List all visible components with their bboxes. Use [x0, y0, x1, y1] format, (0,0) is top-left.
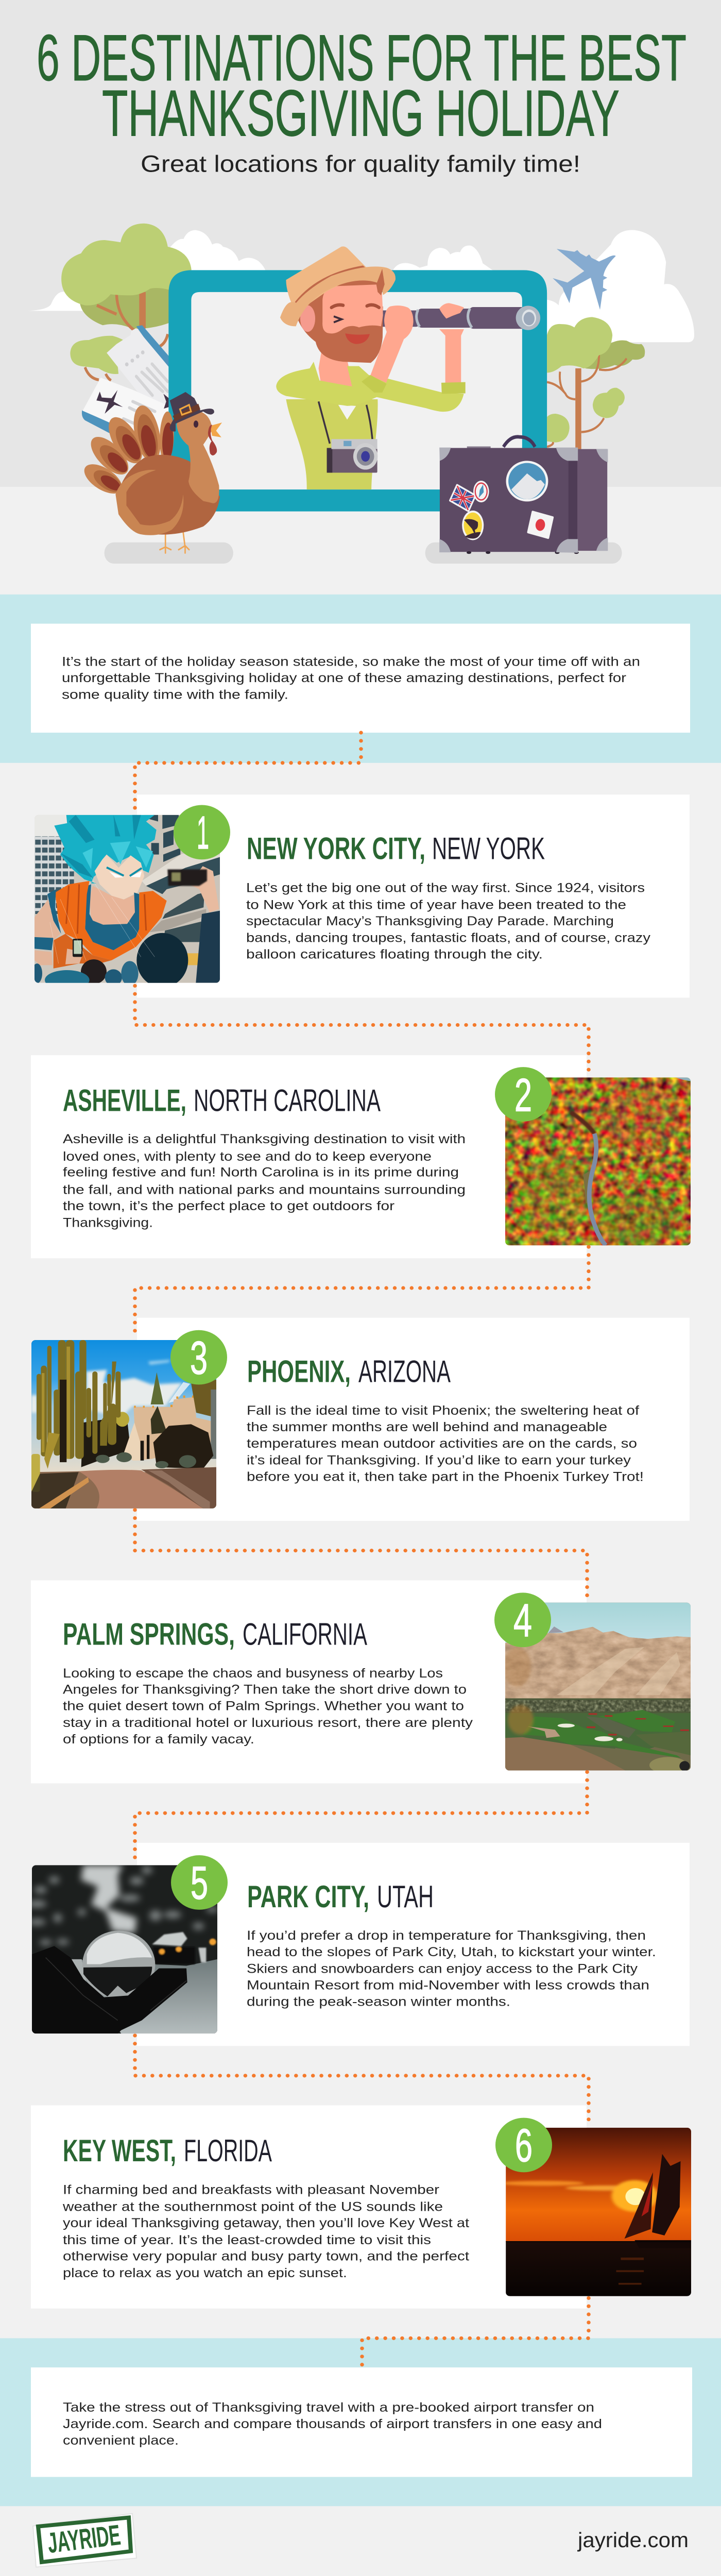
closing text: Jayride.com. Search and compare thousands of airport transfers in one easy and: [63, 2417, 602, 2431]
number badge 4: 4: [513, 1595, 532, 1647]
card 4 text: stay in a traditional hotel or luxurious resort, there are plenty: [63, 1716, 473, 1730]
card 2 heading: ASHEVILLE,: [63, 1083, 186, 1118]
intro band: [0, 595, 721, 763]
logo: Jayride stamp: [33, 2514, 136, 2567]
photo: crystal ball in snow: [28, 1865, 218, 2033]
number badge 6: 6: [515, 2120, 533, 2172]
intro text: [62, 655, 640, 702]
card 4 text: Looking to escape the chaos and busyness of nearby Los: [63, 1666, 443, 1681]
icon: right tree: [547, 317, 645, 449]
gloved hand: [32, 1946, 187, 2033]
intro text: unforgettable Thanksgiving holiday at one of these amazing destinations, perfect for: [62, 671, 626, 685]
card 2 heading: NORTH CAROLINA: [194, 1083, 381, 1118]
closing panel: [31, 2367, 692, 2477]
card 3 text: Fall is the ideal time to visit Phoenix; the sweltering heat of: [247, 1404, 639, 1418]
closing text: [63, 2400, 602, 2448]
website url: jayride.com: [577, 2529, 689, 2552]
man: face: [322, 284, 383, 333]
icon: right cloud: [547, 230, 694, 342]
intro panel: [31, 624, 690, 733]
number badge 5: [171, 1855, 228, 1910]
sticker: mountain: [506, 461, 548, 501]
man: eyes and brows: [334, 316, 341, 323]
turkey: beak: [210, 422, 222, 437]
card 6 text: your ideal Thanksgiving getaway, then you’ll love Key West at: [63, 2216, 469, 2230]
card 5 text: [247, 1928, 656, 2009]
turkey: wing: [115, 470, 183, 535]
card 2 text: the fall, and with national parks and mountains surrounding: [63, 1183, 466, 1197]
card 4 text: [63, 1666, 473, 1747]
card 6 text: If charming bed and breakfasts with pleasant November: [63, 2183, 439, 2197]
turkey: body: [116, 455, 220, 535]
card 5 text: If you’d prefer a drop in temperature for Thanksgiving, then: [247, 1928, 646, 1943]
adobe building: [133, 1397, 211, 1461]
card 1 text: spectacular Macy’s Thanksgiving Day Parade. Marching: [246, 914, 614, 928]
panel: card 2 Asheville: [31, 1055, 691, 1258]
card 2 text: Asheville is a delightful Thanksgiving destination to visit with: [63, 1132, 466, 1146]
sticker: union flag: [449, 484, 477, 513]
man: beard: [316, 307, 383, 363]
icon: small left tree: [70, 336, 127, 381]
card 1 text: [246, 881, 651, 961]
card 6 heading: KEY WEST,: [63, 2133, 176, 2168]
card 3 text: before you eat it, then take part in the Phoenix Turkey Trot!: [247, 1470, 644, 1484]
card 2 text: feeling festive and fun! North Carolina is in its prime during: [63, 1165, 459, 1180]
card 3 text: [247, 1404, 644, 1484]
suitcase: handle: [504, 437, 535, 447]
number badge 2: [495, 1067, 552, 1122]
card 1 text: Let’s get the big one out of the way first. Since 1924, visitors: [246, 881, 645, 895]
man: raised arms: [370, 331, 461, 383]
panel: card 6 Key West: [31, 2106, 691, 2309]
snow ground: [71, 1959, 217, 2033]
photographer hand: [189, 866, 219, 912]
cabin: [152, 1932, 216, 1964]
man: torso: [286, 399, 378, 489]
man: hat: [280, 246, 396, 326]
card 5 text: Skiers and snowboarders can enjoy access to the Park City: [247, 1962, 638, 1976]
panel: card 4 Palm Springs: [31, 1580, 691, 1784]
balloon hair: [54, 815, 157, 884]
card 1 text: to New York at this time of year have been treated to the: [246, 898, 626, 912]
card 6 text: this time of year. It’s the least-crowded time to visit this: [63, 2233, 431, 2247]
card 5 text: head to the slopes of Park City, Utah, to kickstart your winter.: [247, 1945, 656, 1959]
closing text: Take the stress out of Thanksgiving travel with a pre-booked airport transfer on: [63, 2400, 594, 2415]
card 5 heading: UTAH: [377, 1879, 434, 1914]
sticker: kangaroo: [462, 511, 484, 540]
closing band: [0, 2338, 721, 2506]
panel: card 3 Phoenix: [31, 1318, 690, 1521]
panel: card 5 Park City: [28, 1843, 690, 2046]
icon: centre cloud: [393, 245, 492, 270]
intro text: It’s the start of the holiday season stateside, so make the most of your time off with an: [62, 655, 640, 669]
card 6 text: weather at the southernmost point of the US sounds like: [62, 2200, 443, 2214]
icon: turkey: [80, 392, 222, 553]
crowd: [136, 933, 188, 988]
card 5 text: Mountain Resort from mid-November with less crowds than: [247, 1978, 649, 1992]
saguaro cacti: [37, 1340, 121, 1459]
card 3 heading: ARIZONA: [358, 1354, 451, 1389]
icon: traveller with telescope: [276, 246, 540, 489]
turkey: tail feathers: [80, 402, 175, 500]
balloon chest: [90, 886, 138, 925]
balloon face: [95, 855, 144, 900]
turkey: legs: [160, 532, 189, 553]
icon: camera: [327, 439, 377, 473]
closing text: convenient place.: [63, 2434, 179, 2448]
glass ball: [82, 1930, 155, 1998]
card 3 text: temperatures mean outdoor activities are on the cards, so: [247, 1437, 637, 1451]
telescope: [366, 306, 540, 330]
number badge 3: 3: [190, 1332, 208, 1384]
card 6 text: place to relax as you watch an epic sunset.: [63, 2266, 347, 2280]
card 1 heading: NEW YORK: [432, 831, 545, 866]
icon: left tree: [61, 224, 192, 346]
icon: suitcase: [439, 437, 608, 554]
photo: parade balloon: [32, 815, 220, 990]
icon: airplane: [553, 249, 616, 310]
photo: autumn forest: [505, 1077, 691, 1247]
title: [37, 22, 686, 150]
suitcase: metal corners: [439, 448, 608, 553]
wooden rail: [39, 1477, 89, 1509]
turkey: neck and head: [177, 411, 219, 503]
card 2 text: the town, it’s the perfect place to get outdoors for: [63, 1199, 394, 1213]
number badge 2: 2: [514, 1069, 532, 1121]
man: camera straps: [319, 401, 372, 444]
suitcase: feet: [467, 551, 579, 554]
card 1 text: bands, dancing troupes, fantastic floats, and of course, crazy: [246, 931, 651, 945]
card 1 heading: NEW YORK CITY,: [247, 831, 425, 866]
hero illustration: [28, 224, 694, 564]
number badge 3: [170, 1330, 227, 1385]
logo: Jayride stamp: JAYRIDE: [46, 2519, 123, 2560]
man: neck: [319, 351, 353, 387]
man: shirt collar gap: [338, 405, 356, 420]
card 2 text: loved ones, with plenty to see and do to keep everyone: [63, 1149, 432, 1164]
number badge 1: 1: [197, 807, 209, 859]
photo: desert garden: [31, 1340, 216, 1509]
card 2 text: Thanksgiving.: [63, 1216, 153, 1230]
turkey shadow: [105, 543, 233, 564]
card 3 heading: PHOENIX,: [247, 1354, 351, 1389]
card 4 text: Angeles for Thanksgiving? Then take the short drive down to: [63, 1683, 467, 1697]
turkey: eye: [194, 420, 198, 428]
man: hair: [294, 268, 385, 342]
card 5 text: during the peak-season winter months.: [247, 1995, 510, 2009]
balloon gi: [55, 881, 167, 960]
number badge 5: 5: [191, 1857, 208, 1909]
background foliage: [81, 1419, 130, 1467]
suitcase shadow: [425, 543, 622, 564]
card 4 heading: PALM SPRINGS,: [63, 1617, 235, 1652]
card 4 heading: CALIFORNIA: [243, 1617, 368, 1652]
card 4 text: of options for a family vacay.: [63, 1733, 254, 1747]
photo: desert golf course: [504, 1603, 691, 1773]
sticker: compass: [473, 481, 489, 502]
right tree and cactus: [191, 1380, 216, 1418]
turkey: wattle: [208, 425, 217, 455]
number badge 1: [174, 805, 230, 859]
balloon arm: [35, 899, 60, 940]
balloon undershirt: [85, 884, 139, 951]
man: mouth: [345, 333, 370, 344]
icon: left cloud: [28, 230, 265, 311]
card 1 text: balloon caricatures floating through the city.: [246, 947, 543, 961]
card 6 text: [62, 2183, 469, 2280]
card 3 text: it’s ideal for Thanksgiving. If you’d like to earn your turkey: [247, 1453, 631, 1467]
frame: [168, 270, 547, 512]
card 3 text: the summer months are well behind and manageable: [247, 1420, 607, 1434]
suitcase: body: [576, 449, 607, 551]
card 6 text: otherwise very popular and busy party town, and the perfect: [63, 2249, 469, 2263]
sticker: japan flag: [527, 511, 554, 539]
card 5 heading: PARK CITY,: [247, 1879, 369, 1914]
intro text: some quality time with the family.: [62, 688, 288, 702]
card 2 heading: [63, 1083, 381, 1118]
subtitle: Great locations for quality family time!: [141, 150, 580, 177]
card 2 text: [63, 1132, 466, 1230]
header background: [0, 0, 721, 595]
photo: sunset sailboat: [501, 2128, 691, 2296]
panel: card 1 New York City: [32, 794, 690, 998]
number badge 6: [495, 2118, 552, 2172]
man: hands: [384, 303, 464, 339]
number badge 4: [494, 1592, 551, 1647]
card 4 text: the quiet desert town of Palm Springs. Whether you want to: [63, 1699, 464, 1714]
card 6 heading: FLORIDA: [184, 2133, 272, 2168]
man: cuffs: [362, 375, 466, 394]
path: [31, 1471, 107, 1509]
tall tree: [151, 1372, 164, 1404]
garden bushes: [153, 1424, 213, 1469]
icon: boarding passes: [82, 325, 174, 452]
dotted connector path: [135, 733, 589, 2368]
man: sleeves: [276, 362, 464, 412]
man: ear: [300, 306, 315, 332]
turkey: pilgrim hat: [170, 392, 214, 432]
